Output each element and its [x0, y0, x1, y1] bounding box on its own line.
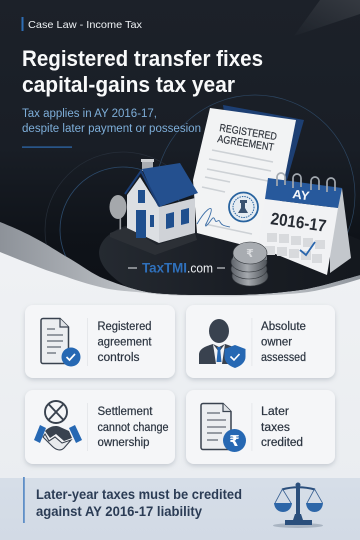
subtitle [22, 108, 201, 135]
brand: TaxTMI.com [128, 260, 225, 276]
icon: prohibited sign and handshake [34, 401, 82, 450]
card text: Settlement [98, 406, 153, 418]
card: settlement cannot change ownership [25, 390, 175, 464]
card: later taxes credited [186, 390, 335, 464]
card: absolute owner assessed [186, 305, 335, 378]
illustration: rupee coins: ₹ [246, 247, 254, 260]
background: dark platform [99, 222, 360, 295]
card text: taxes [261, 422, 290, 434]
icon: document with check [41, 318, 80, 366]
background: thin arcs [45, 95, 355, 308]
icon: owner with shield [199, 319, 246, 368]
card text: Registered [98, 321, 152, 333]
signature [197, 208, 230, 227]
subtitle rule [22, 146, 72, 148]
subtitle: despite later payment or possesion [22, 123, 201, 135]
tree [110, 195, 126, 231]
icon: scales of justice [273, 482, 323, 528]
illustration: rupee coins [231, 242, 268, 286]
title: capital-gains tax year [22, 72, 235, 97]
document heading: REGISTERED [219, 122, 278, 143]
card text: owner [261, 336, 292, 348]
document heading: AGREEMENT [217, 133, 275, 154]
icon: document with rupee badge: ₹ [229, 432, 240, 450]
card text: ownership [98, 437, 150, 449]
illustration: AY 2016-17 calendar [258, 173, 351, 275]
title [22, 46, 263, 97]
conclusion band [0, 477, 360, 540]
background: dark hero [0, 0, 360, 295]
illustration: house [110, 159, 198, 255]
card text: controls [98, 352, 140, 364]
calendar year: 2016-17 [269, 209, 328, 236]
eyebrow: category: Case Law - Income Tax [28, 19, 143, 31]
card text: cannot change [98, 422, 168, 434]
calendar rings [277, 173, 335, 192]
illustration: registered agreement document [193, 105, 304, 252]
background: streak of light [294, 0, 360, 36]
conclusion text: against AY 2016-17 liability [36, 504, 202, 519]
card text: credited [261, 437, 303, 449]
subtitle: Tax applies in AY 2016-17, [22, 108, 157, 120]
card text: Later [261, 406, 289, 418]
seal [229, 192, 258, 222]
card: registered agreement controls [25, 305, 175, 378]
conclusion text: Later-year taxes must be credited [36, 487, 242, 502]
calendar check [300, 242, 315, 255]
conclusion text [36, 487, 242, 519]
card text [261, 406, 303, 449]
card text [98, 321, 152, 364]
title: Registered transfer fixes [22, 46, 263, 71]
calendar header: AY [292, 187, 311, 203]
card text: agreement [98, 336, 152, 348]
icon: document with rupee badge [201, 404, 246, 452]
card text [261, 321, 306, 364]
brand: TaxTMI.com: .com [187, 262, 213, 276]
background: grey swoosh [0, 215, 360, 296]
brand: TaxTMI.com: TaxTMI [142, 260, 187, 276]
card text: assessed [261, 352, 306, 364]
card text [98, 406, 168, 449]
card text: Absolute [261, 321, 306, 333]
document heading [217, 122, 278, 154]
